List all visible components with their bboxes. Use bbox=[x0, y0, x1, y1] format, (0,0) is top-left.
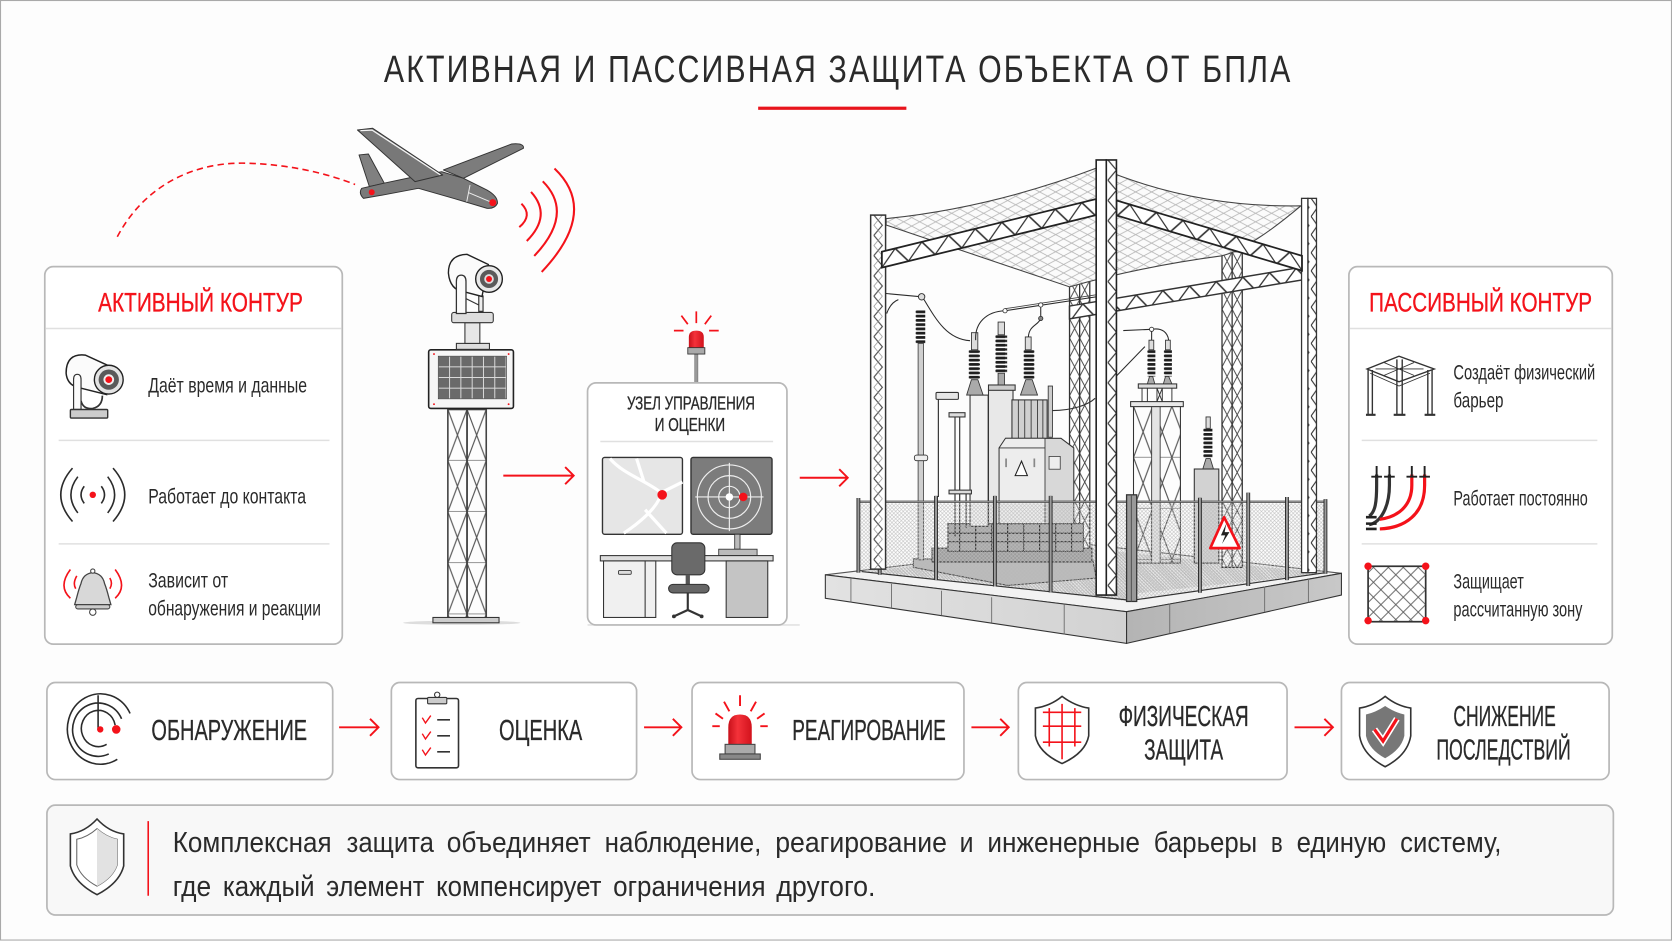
text: depends on detection bbox=[148, 569, 321, 620]
map screen bbox=[602, 457, 682, 534]
back left post bbox=[1070, 280, 1090, 549]
arrow bbox=[644, 719, 681, 736]
right post bbox=[1302, 198, 1316, 573]
flow step: assessment bbox=[391, 683, 637, 780]
icon: alarm bbox=[712, 695, 768, 759]
title underline bbox=[758, 107, 906, 110]
small cabinet bbox=[1194, 469, 1219, 563]
text: works permanently: Работает постоянно bbox=[1453, 486, 1588, 510]
icon: camera bbox=[66, 355, 123, 418]
top beam left bbox=[882, 199, 1096, 268]
desk and chair bbox=[600, 534, 773, 618]
conclusion text: реагирование bbox=[775, 827, 947, 859]
back right post bbox=[1222, 252, 1242, 567]
conclusion text: другого. bbox=[776, 871, 875, 903]
conclusion text: инженерные bbox=[987, 827, 1140, 859]
icon: bell bbox=[64, 569, 122, 615]
icon: shield with check bbox=[1360, 696, 1411, 767]
fence rails and posts bbox=[858, 493, 1325, 600]
label: detection: ОБНАРУЖЕНИЕ bbox=[151, 715, 307, 747]
electrical equipment bbox=[883, 293, 1219, 585]
dashed flight path bbox=[117, 163, 355, 237]
label: assessment: ОЦЕНКА bbox=[499, 715, 583, 747]
text: works before contact: Работает до контакта bbox=[148, 484, 306, 508]
label: mitigation: ПОСЛЕДСТВИЙ bbox=[1436, 732, 1571, 766]
label: physical protection: ЗАЩИТА bbox=[1144, 734, 1224, 766]
top beam right bbox=[1116, 200, 1302, 271]
icon: drone bbox=[357, 128, 523, 208]
control node heading bbox=[627, 394, 755, 435]
pipes bbox=[938, 399, 960, 497]
text: protects calculated zone bbox=[1453, 570, 1583, 621]
left pole bbox=[918, 343, 923, 560]
net canopy bbox=[886, 167, 1301, 287]
tower lattice bbox=[448, 410, 486, 619]
text: protects calculated zone: Защищает bbox=[1453, 570, 1524, 594]
flow step: physical protection bbox=[1018, 683, 1287, 780]
transformer body bbox=[970, 395, 988, 526]
label: mitigation: СНИЖЕНИЕ bbox=[1453, 701, 1556, 733]
panel: active contour bbox=[45, 267, 342, 644]
conclusion text: объединяет bbox=[447, 827, 591, 859]
front fence post bbox=[1127, 495, 1137, 601]
control node heading: УЗЕЛ УПРАВЛЕНИЯ bbox=[627, 394, 755, 414]
arrow bbox=[339, 719, 379, 736]
tower camera bbox=[448, 254, 502, 314]
active contour heading: АКТИВНЫЙ КОНТУР bbox=[98, 287, 303, 317]
title: АКТИВНАЯ И ПАССИВНАЯ ЗАЩИТА ОБЪЕКТА ОТ БПЛА bbox=[384, 48, 1292, 91]
solar panel bbox=[429, 350, 513, 408]
concrete base bbox=[825, 544, 1341, 643]
conclusion text: компенсирует bbox=[436, 871, 601, 903]
control cabinet bbox=[999, 438, 1074, 524]
text: gives time and data: Даёт время и данные bbox=[148, 373, 307, 397]
signal arcs bbox=[519, 168, 574, 272]
plinth bbox=[913, 559, 1096, 585]
protected site illustration bbox=[825, 160, 1341, 643]
radar screen bbox=[691, 457, 772, 534]
conclusion text: наблюдение, bbox=[605, 827, 761, 859]
text: creates a physical barrier bbox=[1453, 361, 1595, 412]
back beam bbox=[1070, 267, 1304, 319]
text: protects calculated zone: рассчитанную зону bbox=[1453, 597, 1583, 621]
arrow: control node to site bbox=[800, 469, 848, 486]
left post bbox=[871, 215, 886, 569]
arrow bbox=[1295, 719, 1333, 736]
icon: shield with grid bbox=[1035, 696, 1089, 764]
panel: passive contour bbox=[1349, 267, 1612, 644]
conclusion text: в bbox=[1271, 827, 1283, 859]
icon: danger sign bbox=[1210, 517, 1240, 548]
label: physical protection bbox=[1119, 701, 1249, 766]
icon: radio waves bbox=[61, 468, 125, 521]
mast with camera and solar panel bbox=[403, 254, 520, 625]
flow step: detection bbox=[47, 683, 333, 780]
text: depends on detection: Зависит от bbox=[148, 569, 228, 593]
text: creates a physical barrier: Создаёт физический bbox=[1453, 361, 1595, 385]
panel: conclusion bbox=[47, 805, 1613, 915]
insulators bbox=[916, 310, 925, 343]
conclusion text: ограничения bbox=[613, 871, 766, 903]
conclusion text: единую bbox=[1297, 827, 1386, 859]
panel: control node bbox=[588, 383, 800, 625]
control node heading: И ОЦЕНКИ bbox=[655, 415, 725, 435]
fence mesh bbox=[858, 503, 1325, 599]
conclusion text: где bbox=[173, 871, 211, 903]
arrow bbox=[971, 719, 1009, 736]
icon: shield bbox=[70, 819, 124, 895]
front post bbox=[1096, 160, 1116, 595]
right lattice tower bbox=[1134, 406, 1180, 563]
conclusion text: элемент bbox=[326, 871, 424, 903]
conclusion text: защита bbox=[347, 827, 434, 859]
text: creates a physical barrier: барьер bbox=[1453, 388, 1504, 412]
flow step: mitigation bbox=[1341, 683, 1609, 780]
icon: radar bbox=[67, 694, 130, 764]
label: mitigation bbox=[1436, 701, 1571, 766]
text: depends on detection: обнаружения и реакции bbox=[148, 596, 321, 620]
conclusion text: и bbox=[960, 827, 974, 859]
label: physical protection: ФИЗИЧЕСКАЯ bbox=[1119, 701, 1249, 733]
conclusion text: каждый bbox=[223, 871, 315, 903]
icon: clipboard bbox=[416, 692, 459, 768]
conclusion text: Комплексная bbox=[173, 827, 332, 859]
arrow: mast to control node bbox=[503, 467, 574, 484]
wires bbox=[883, 293, 1169, 376]
label: response: РЕАГИРОВАНИЕ bbox=[792, 715, 946, 747]
icon: frame bbox=[1366, 356, 1435, 415]
conclusion text: барьеры bbox=[1154, 827, 1257, 859]
icon: net bbox=[1364, 563, 1429, 624]
conclusion text: систему, bbox=[1400, 827, 1501, 859]
icon: beacon bbox=[674, 311, 719, 383]
conclusion text bbox=[173, 827, 1501, 903]
passive contour heading: ПАССИВНЫЙ КОНТУР bbox=[1369, 287, 1592, 317]
flow step: response bbox=[692, 683, 964, 780]
icon: cables bbox=[1366, 466, 1430, 529]
